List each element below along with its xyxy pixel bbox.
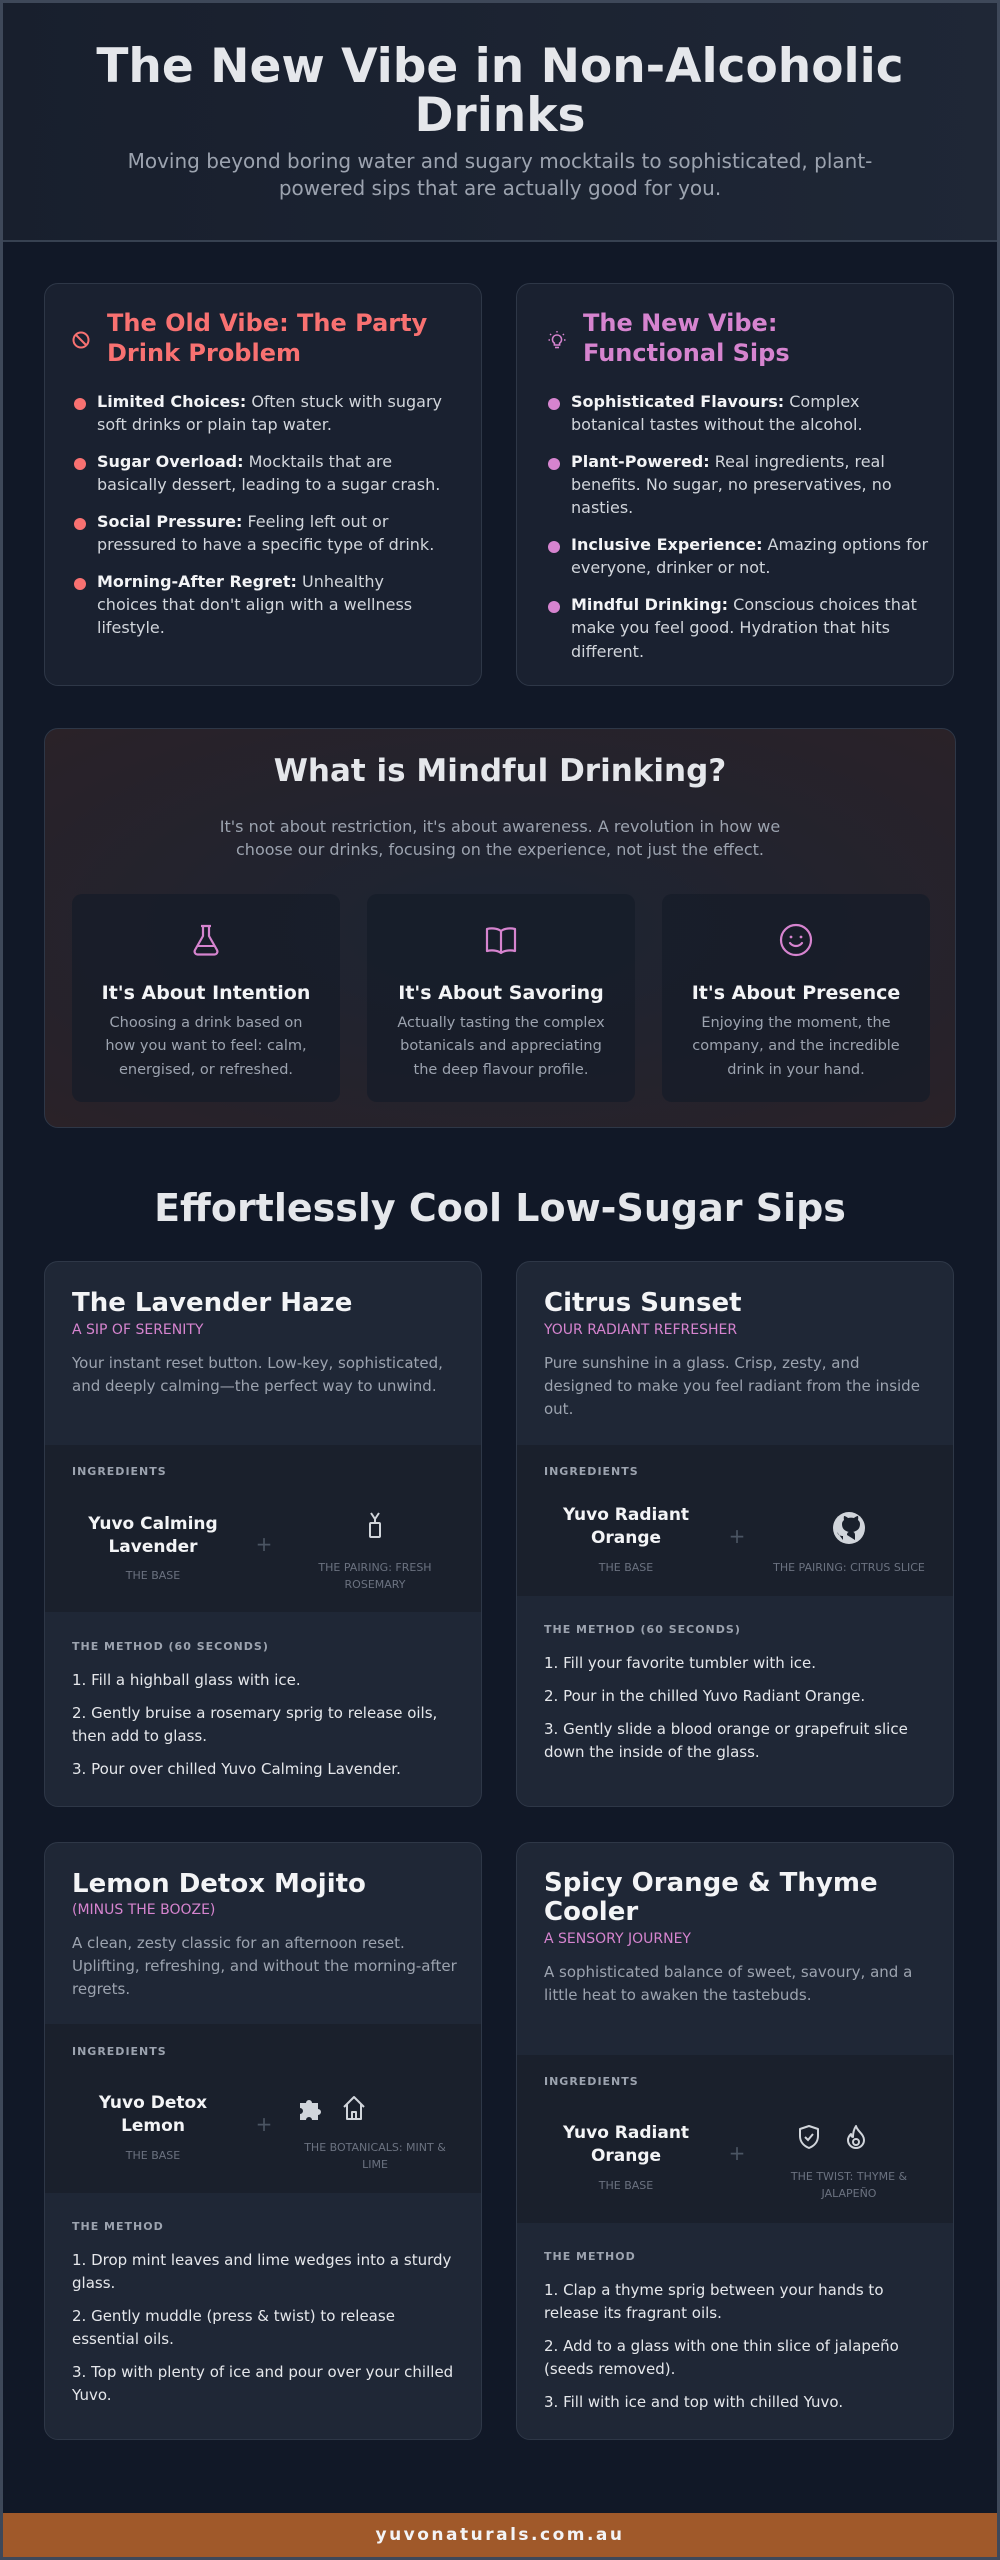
list: new vibe benefits bbox=[548, 392, 928, 661]
recipe description: A sophisticated balance of sweet, savoury, and a little heat to awaken the tastebuds. bbox=[544, 1962, 912, 2004]
method label: THE METHOD bbox=[544, 2250, 636, 2263]
method bbox=[72, 1640, 437, 1778]
icon: flask bbox=[194, 924, 218, 956]
base name bbox=[562, 1505, 689, 1548]
base name bbox=[88, 1514, 218, 1556]
heading: new vibe: Functional Sips bbox=[583, 339, 790, 367]
icons: mint & lime bbox=[300, 2096, 365, 2120]
text: presence: Enjoying the moment, the company, and the incredible drink in your hand. bbox=[692, 1015, 900, 1078]
recipe tagline: A SENSORY JOURNEY bbox=[544, 1931, 691, 1947]
method bbox=[544, 2250, 899, 2410]
recipe card: spicy orange & thyme cooler bbox=[516, 1842, 954, 2440]
plus: + bbox=[256, 1532, 272, 1556]
ingredients label: INGREDIENTS bbox=[544, 1465, 639, 1478]
title: presence: It's About Presence bbox=[692, 982, 900, 1004]
method steps bbox=[544, 2280, 899, 2410]
title: savoring: It's About Savoring bbox=[398, 982, 604, 1004]
list: old vibe problems: choices that don't align with a wellness lifestyle. bbox=[97, 595, 412, 637]
card: intention bbox=[72, 894, 340, 1102]
base name: Lavender bbox=[108, 1536, 198, 1556]
heading: old vibe bbox=[107, 309, 427, 367]
heading: old vibe: Drink Problem bbox=[107, 339, 301, 367]
list: new vibe benefits: Sophisticated Flavours: Complex botanical tastes without the alcohol. bbox=[571, 392, 863, 434]
plus: + bbox=[256, 2112, 272, 2136]
base label: THE BASE bbox=[126, 1569, 180, 1582]
recipe card: lemon detox mojito bbox=[44, 1842, 482, 2440]
list: old vibe problems bbox=[74, 392, 442, 637]
card: savoring bbox=[367, 894, 635, 1102]
ingredients label: INGREDIENTS bbox=[72, 2045, 167, 2058]
list: old vibe problems: Social Pressure: Feeling left out or pressured to have a specific type of drink. bbox=[97, 512, 434, 554]
base label: THE BASE bbox=[126, 2149, 180, 2162]
icons: thyme & jalapeño bbox=[799, 2125, 865, 2149]
pairing label: ROSEMARY bbox=[345, 1578, 405, 1590]
footer bbox=[0, 2513, 1000, 2560]
method steps: 3. Gently slide a blood orange or grapefruit slice down the inside of the glass. bbox=[544, 1720, 908, 1760]
heading: old vibe: The Old Vibe: The Party bbox=[107, 309, 427, 337]
botanicals label: THE BOTANICALS: MINT & bbox=[304, 2141, 446, 2154]
section heading: recipes: Effortlessly Cool Low-Sugar Sips bbox=[154, 1186, 846, 1230]
panel: mindful drinking bbox=[44, 728, 956, 1128]
method label: THE METHOD (60 SECONDS) bbox=[544, 1623, 741, 1636]
heading: mindful: What is Mindful Drinking? bbox=[274, 753, 726, 789]
base name: Yuvo Radiant bbox=[563, 2123, 689, 2143]
base name: Lemon bbox=[121, 2116, 185, 2136]
ingredients block bbox=[517, 1445, 955, 1596]
base name: Yuvo Calming bbox=[88, 1514, 218, 1534]
method bbox=[544, 1623, 908, 1760]
method steps: 2. Add to a glass with one thin slice of jalapeño (seeds removed). bbox=[544, 2336, 899, 2378]
method steps: 1. Fill your favorite tumbler with ice. bbox=[544, 1654, 816, 1672]
heading: new vibe: The New Vibe: bbox=[583, 309, 777, 337]
base label: THE BASE bbox=[599, 1561, 653, 1574]
recipe tagline: (MINUS THE BOOZE) bbox=[72, 1902, 215, 1918]
recipe title: Spicy Orange & Thyme bbox=[544, 1868, 878, 1898]
method steps: 3. Fill with ice and top with chilled Yuvo. bbox=[544, 2392, 843, 2410]
icon: smiley bbox=[780, 924, 812, 956]
card: presence bbox=[662, 894, 930, 1102]
pairing label: THE PAIRING: CITRUS SLICE bbox=[773, 1561, 925, 1574]
text: intention: Choosing a drink based on how you want to feel: calm, energised, or refreshed. bbox=[105, 1015, 307, 1078]
recipe title: The Lavender Haze bbox=[72, 1288, 352, 1318]
text: savoring: Actually tasting the complex botanicals and appreciating the deep flavour profile. bbox=[397, 1015, 605, 1078]
base name: Yuvo Detox bbox=[99, 2093, 207, 2113]
method steps: 3. Top with plenty of ice and pour over your chilled Yuvo. bbox=[72, 2362, 453, 2404]
header bbox=[0, 0, 1000, 242]
icon: no sign bbox=[72, 332, 90, 348]
panel: old vibe bbox=[44, 283, 482, 686]
twist label bbox=[790, 2170, 907, 2200]
method steps bbox=[544, 1654, 908, 1760]
base label: THE BASE bbox=[599, 2179, 653, 2192]
list: old vibe problems: Sugar Overload: Mocktails that are basically dessert, leading to a sugar crash. bbox=[97, 452, 440, 494]
ingredients block bbox=[517, 2055, 955, 2223]
icon: lightbulb bbox=[548, 331, 566, 348]
base name bbox=[562, 2123, 689, 2166]
method steps: 1. Clap a thyme sprig between your hands to release its fragrant oils. bbox=[544, 2280, 884, 2322]
method steps: 1. Fill a highball glass with ice. bbox=[72, 1670, 301, 1688]
base name: Yuvo Radiant bbox=[563, 1505, 689, 1525]
list: new vibe benefits: Inclusive Experience: Amazing options for everyone, drinker or not. bbox=[571, 535, 928, 577]
twist label: THE TWIST: THYME & bbox=[791, 2170, 907, 2183]
recipe card: lavender haze bbox=[44, 1261, 482, 1807]
method steps: 2. Gently bruise a rosemary sprig to release oils, then add to glass. bbox=[72, 1704, 437, 1744]
recipe title: Lemon Detox Mojito bbox=[72, 1869, 366, 1899]
list: new vibe benefits: Mindful Drinking: Conscious choices that make you feel good. Hydration that hits different. bbox=[571, 595, 917, 661]
intro text: It's not about restriction, it's about awareness. A revolution in how we choose our drinks, focusing on the experience, not just the effect. bbox=[220, 817, 780, 859]
icon: rosemary bbox=[369, 1512, 381, 1538]
plus: + bbox=[729, 1524, 745, 1548]
pairing label bbox=[318, 1561, 432, 1590]
footer: yuvonaturals.com.au bbox=[375, 2525, 624, 2545]
title: intention: It's About Intention bbox=[102, 982, 310, 1004]
ingredients label: INGREDIENTS bbox=[72, 1465, 167, 1478]
base name bbox=[98, 2093, 207, 2136]
method label: THE METHOD bbox=[72, 2220, 164, 2233]
method label: THE METHOD (60 SECONDS) bbox=[72, 1640, 269, 1653]
method bbox=[72, 2220, 453, 2404]
method steps: 1. Drop mint leaves and lime wedges into a sturdy glass. bbox=[72, 2250, 451, 2292]
plus: + bbox=[729, 2141, 745, 2165]
recipe description: Your instant reset button. Low-key, sophisticated, and deeply calming—the perfect way to unwind. bbox=[72, 1354, 443, 1394]
ingredients label: INGREDIENTS bbox=[544, 2075, 639, 2088]
recipe tagline: A SIP OF SERENITY bbox=[72, 1322, 203, 1338]
method steps: 2. Gently muddle (press & twist) to release essential oils. bbox=[72, 2306, 395, 2348]
title: Drinks bbox=[414, 88, 586, 143]
list: old vibe problems: Morning-After Regret: Unhealthy bbox=[97, 572, 384, 591]
recipe description: A clean, zesty classic for an afternoon reset. Uplifting, refreshing, and without the morning-after regrets. bbox=[72, 1934, 457, 1998]
method steps: 3. Pour over chilled Yuvo Calming Lavender. bbox=[72, 1760, 401, 1778]
list: old vibe problems: Limited Choices: Often stuck with sugary soft drinks or plain tap water. bbox=[97, 392, 442, 434]
recipe card: citrus sunset bbox=[516, 1261, 954, 1807]
botanicals label bbox=[304, 2141, 446, 2170]
ingredients block bbox=[45, 2024, 483, 2193]
recipe title: Cooler bbox=[544, 1897, 638, 1927]
method steps: 2. Pour in the chilled Yuvo Radiant Orange. bbox=[544, 1686, 865, 1704]
heading: new vibe bbox=[583, 309, 790, 367]
recipe description: Pure sunshine in a glass. Crisp, zesty, and designed to make you feel radiant from the inside out. bbox=[544, 1354, 920, 1418]
recipe title: Citrus Sunset bbox=[544, 1288, 742, 1318]
icon: book bbox=[486, 927, 516, 954]
list: new vibe benefits: Plant-Powered: Real ingredients, real benefits. No sugar, no preservatives, no nasties. bbox=[571, 452, 892, 517]
subtitle: Moving beyond boring water and sugary mocktails to sophisticated, plant-powered sips that are actually good for you. bbox=[128, 149, 872, 200]
recipe title bbox=[544, 1868, 878, 1927]
title: The New Vibe in Non-Alcoholic bbox=[96, 39, 904, 94]
recipe tagline: YOUR RADIANT REFRESHER bbox=[544, 1322, 737, 1338]
panel: new vibe bbox=[516, 283, 954, 686]
title bbox=[96, 39, 904, 143]
botanicals label: LIME bbox=[362, 2158, 388, 2170]
twist label: JALAPEÑO bbox=[822, 2186, 876, 2200]
ingredients block bbox=[45, 1445, 483, 1612]
base name: Orange bbox=[591, 1528, 661, 1548]
method steps bbox=[72, 1670, 437, 1778]
base name: Orange bbox=[591, 2146, 661, 2166]
pairing label: THE PAIRING: FRESH bbox=[318, 1561, 432, 1574]
method steps bbox=[72, 2250, 453, 2404]
icon: citrus bbox=[833, 1512, 865, 1544]
